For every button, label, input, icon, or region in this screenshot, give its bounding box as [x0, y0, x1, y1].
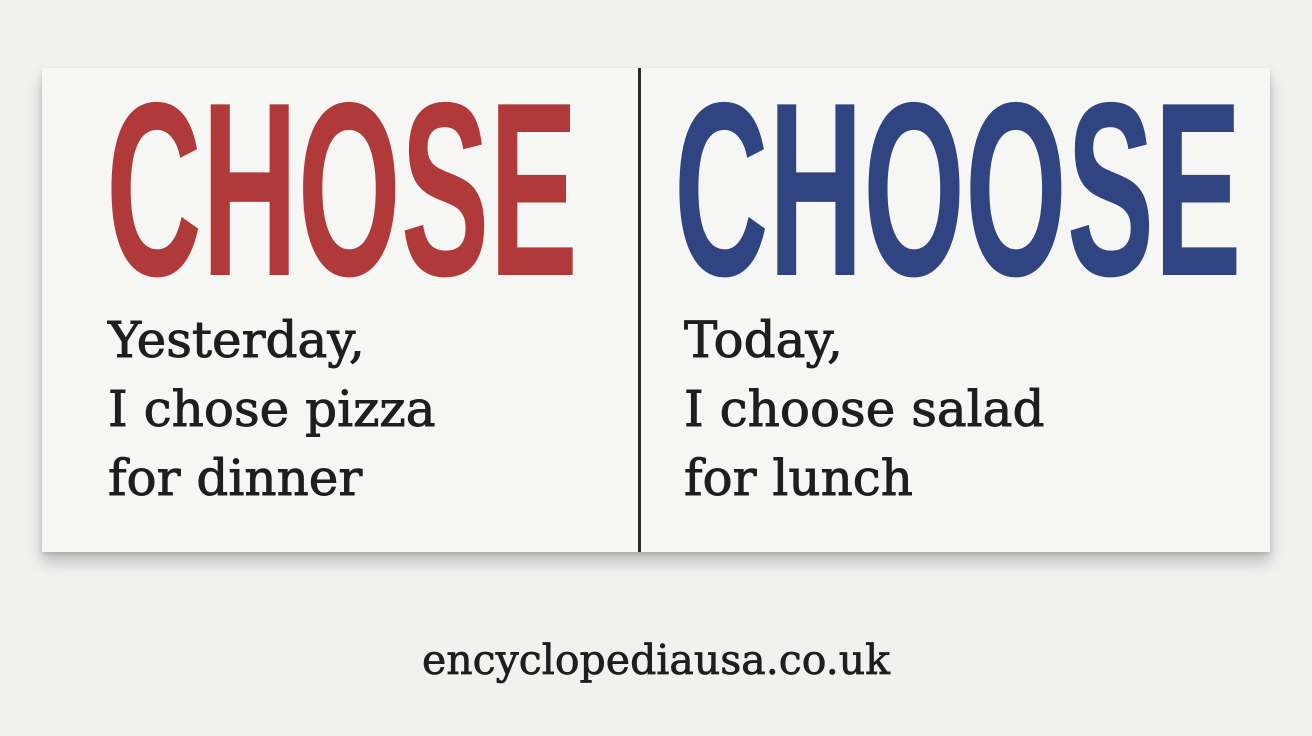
text block: choose example: I choose salad — [684, 380, 1044, 438]
panel: comparison card — [42, 68, 1270, 552]
divider line — [638, 68, 641, 552]
text block: chose example: Yesterday, — [108, 311, 365, 369]
heading: CHOOSE: CHOOSE — [674, 50, 1242, 328]
text block: chose example: for dinner — [108, 449, 362, 507]
text block: choose example — [684, 311, 1044, 507]
text block: choose example: Today, — [684, 311, 843, 369]
text block: chose example: I chose pizza — [108, 380, 436, 438]
heading: CHOSE: CHOSE — [106, 50, 578, 328]
text block: choose example: for lunch — [684, 449, 913, 507]
text block: chose example — [107, 311, 436, 507]
footer: website: encyclopediausa.co.uk — [422, 636, 890, 684]
